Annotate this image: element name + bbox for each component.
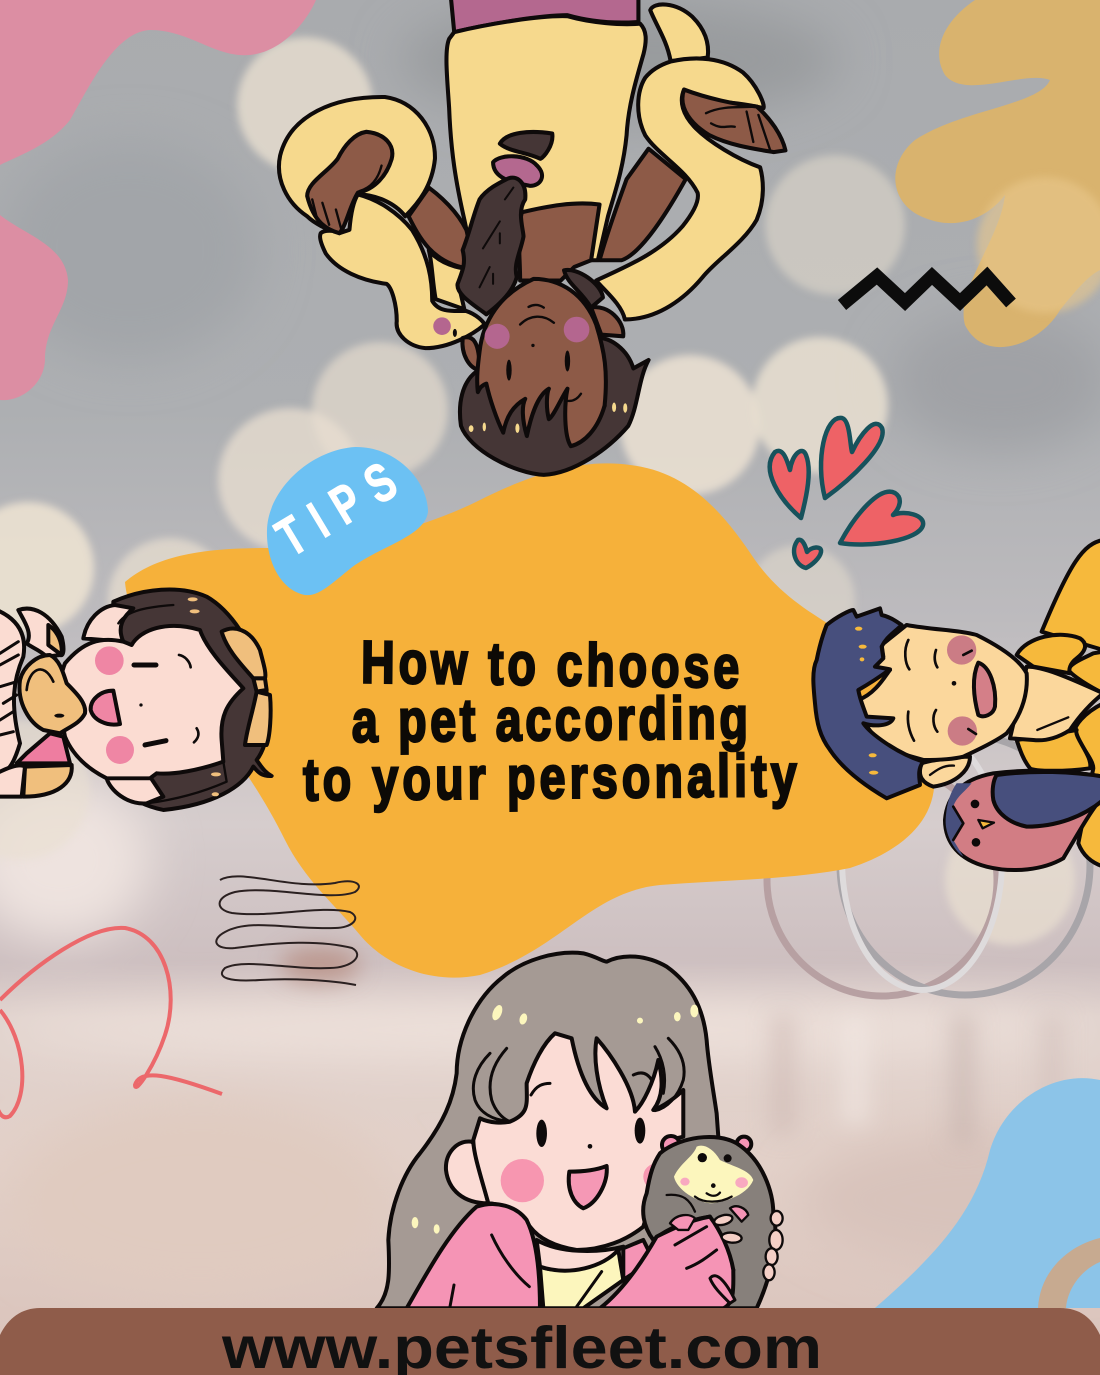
character: sideways girl with teddy at left xyxy=(0,590,272,810)
decorative blob: tan corner arc xyxy=(1038,1238,1100,1308)
title text: How to choose xyxy=(361,629,740,701)
footer bar xyxy=(0,1308,1100,1375)
decorative blob: blue bottom right xyxy=(875,1078,1100,1308)
character: girl with hamster at bottom xyxy=(377,953,783,1308)
decorative blob: pink top left xyxy=(0,0,316,165)
title text: to your personality xyxy=(303,742,797,814)
badge: TIPS xyxy=(266,447,428,595)
decorative blob: tan top right xyxy=(895,0,1100,347)
zigzag icon xyxy=(842,276,1011,305)
character: upside-down girl with snake xyxy=(279,0,785,475)
icon: hearts xyxy=(770,418,923,568)
orange title blob xyxy=(125,463,934,978)
badge: TIPS: TIPS xyxy=(266,451,407,568)
red loop scribble xyxy=(0,928,222,1117)
wedding rings xyxy=(767,730,1090,996)
decorative blob: pink left xyxy=(0,215,68,400)
title text: a pet according xyxy=(352,685,748,755)
character: sideways boy with bird at right xyxy=(813,540,1100,870)
scribble lines xyxy=(216,876,359,985)
title text xyxy=(303,629,797,814)
